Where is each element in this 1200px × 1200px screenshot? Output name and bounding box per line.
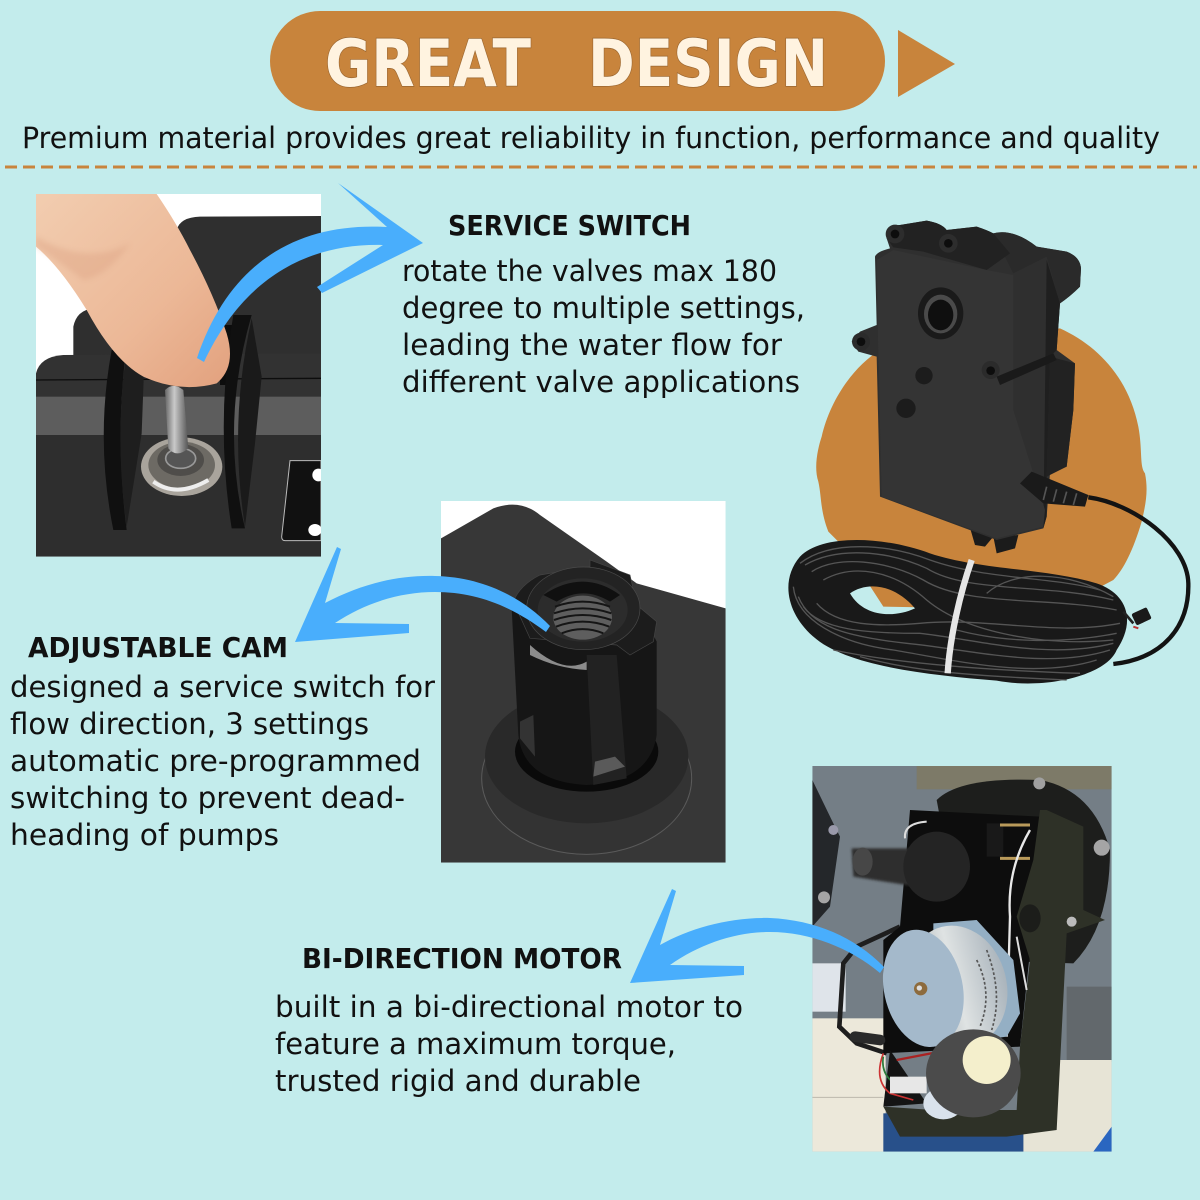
text: adjustable cam description: automatic pre-programmed [10, 744, 421, 778]
text: service switch description: different valve applications [402, 365, 800, 399]
text: bi-direction motor description [275, 990, 743, 1098]
motor [933, 920, 1020, 1047]
upper hump [993, 232, 1081, 303]
toggle [165, 386, 188, 453]
face highlight [877, 250, 1045, 538]
product: actuator with cable [788, 221, 1188, 683]
text: bi-direction motor description: built in a bi-directional motor to [275, 990, 743, 1024]
side panel [1047, 357, 1075, 477]
title banner: DESIGN [588, 27, 828, 102]
feet [971, 530, 993, 547]
top bosses [886, 225, 904, 243]
photo: bi-direction motor [812, 766, 1112, 1152]
photo: adjustable cam [441, 501, 726, 863]
back gear disc [937, 780, 1110, 963]
title banner [270, 11, 885, 111]
text: service switch description: rotate the valves max 180 [402, 254, 777, 288]
side boss [852, 333, 870, 351]
lead [1088, 497, 1188, 664]
wires [855, 1037, 880, 1040]
housing interior [883, 810, 1040, 1053]
switch [987, 823, 1003, 857]
tie [948, 560, 972, 673]
post [512, 608, 657, 785]
nut [141, 437, 222, 496]
cable coil [788, 540, 1127, 683]
arrow: adjustable cam [295, 547, 550, 642]
text: service switch description: leading the water flow for [402, 328, 782, 362]
text: service switch description: degree to multiple settings, [402, 291, 805, 325]
text: bi-direction motor description: feature a maximum torque, [275, 1027, 676, 1061]
text: service switch description [402, 254, 805, 399]
text: adjustable cam description: heading of pumps [10, 818, 279, 852]
foam and knob [923, 1091, 958, 1120]
right upright [224, 315, 252, 528]
frame [883, 810, 1105, 1137]
port [918, 287, 963, 339]
connector [1123, 607, 1152, 628]
photo: service switch [36, 194, 324, 557]
text: adjustable cam description: switching to prevent dead- [10, 781, 405, 815]
arrow: service switch [197, 183, 423, 362]
heading: adjustable cam: ADJUSTABLE CAM [28, 631, 288, 664]
label plate [282, 461, 321, 541]
subtitle: Premium material provides great reliability in function, performance and quality [22, 121, 1160, 155]
text: adjustable cam description: designed a service switch for [10, 670, 435, 704]
title banner: GREAT [325, 27, 531, 102]
buttons [915, 367, 933, 384]
arrow: bi-direction motor [630, 889, 884, 983]
heading: bi-direction motor: BI-DIRECTION MOTOR [302, 942, 622, 975]
finger [36, 194, 230, 387]
gasket outline [839, 927, 900, 1053]
heading: service switch: SERVICE SWITCH [448, 209, 691, 242]
body silhouette [852, 221, 1081, 540]
head [513, 560, 657, 655]
text: bi-direction motor description: trusted rigid and durable [275, 1064, 641, 1098]
left upright [104, 350, 127, 530]
shaft [850, 846, 908, 886]
text: adjustable cam description [10, 670, 435, 852]
text: adjustable cam description: flow direction, 3 settings [10, 707, 369, 741]
orange brush circle [816, 328, 1147, 608]
cable gland [1020, 472, 1088, 507]
icon: title triangle arrow [898, 30, 955, 97]
